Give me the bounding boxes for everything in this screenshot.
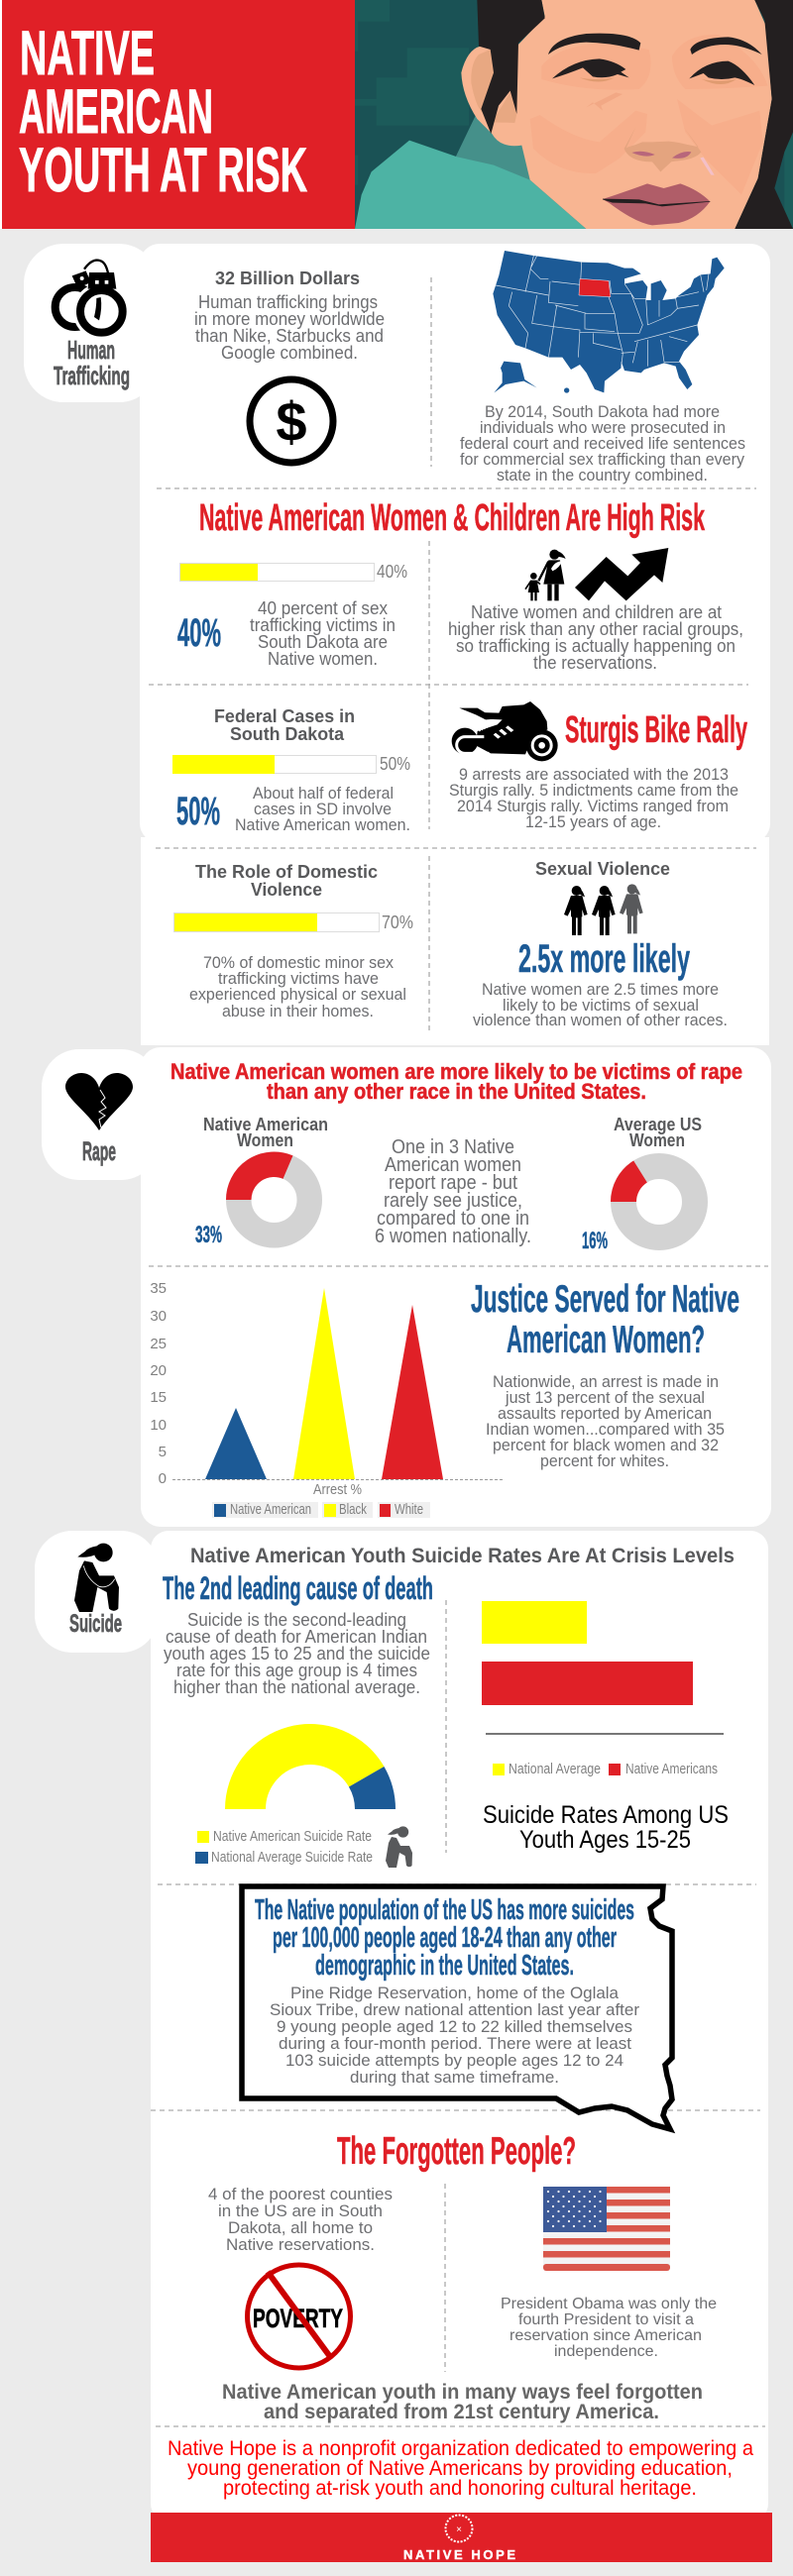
progress bar: 40 percent: 40% (377, 562, 407, 582)
heading: domestic violence (195, 862, 378, 900)
heading: federal cases (214, 706, 355, 744)
title (19, 19, 307, 205)
stat: 40 percent: 40% (177, 611, 221, 655)
chart caption (483, 1801, 729, 1854)
text block: higher risk: so trafficking is actually happening on (456, 636, 736, 656)
text block: domestic abuse: abuse in their homes. (222, 1002, 374, 1020)
text block: forgotten statement (222, 2381, 703, 2423)
text block: second-leading cause (164, 1610, 430, 1697)
callout text: during a four-month period. There were at least (279, 2034, 631, 2053)
text block: one in 3: 6 women nationally. (375, 1226, 531, 1247)
progress bar: 70 percent: 70% (382, 912, 413, 932)
heading: crisis levels: Native American Youth Suicide Rates Are At Crisis Levels (190, 1545, 735, 1567)
text block: South Dakota prosecutions: state in the country combined. (497, 466, 708, 484)
section label: human trafficking (54, 335, 130, 390)
icon: motorcycle (452, 701, 558, 761)
text block: domestic abuse: trafficking victims have (218, 969, 379, 988)
text block: forgotten statement: and separated from 21st century America. (264, 2401, 659, 2423)
footer: Native Hope: NATIVE HOPE (403, 2547, 515, 2562)
text block: arrests: percent for whites. (540, 1451, 669, 1470)
icon: small grieving girl (386, 1826, 412, 1868)
chart caption: Suicide Rates Among US (483, 1801, 729, 1829)
stat: 40 percent: 40 percent of sex (258, 598, 388, 618)
chart: arrest percent by race: Native American (230, 1501, 311, 1518)
section label: rape: Rape (82, 1136, 116, 1166)
chart: arrest percent by race: 20 (150, 1362, 167, 1379)
text block: Sturgis: 9 arrests are associated with the 2013 (459, 765, 729, 784)
heading: sexual violence: Sexual Violence (535, 859, 670, 879)
callout heading (255, 1894, 634, 1982)
callout text: Sioux Tribe, drew national attention last year after (270, 2000, 639, 2019)
panel: rape (42, 1047, 771, 1527)
footer: Native Hope (151, 2513, 772, 2562)
text block: poorest counties: in the US are in South (218, 2201, 383, 2220)
text block: forgotten statement: Native American youth in many ways feel forgotten (222, 2381, 703, 2404)
text block: one in 3 (375, 1136, 531, 1247)
icon: grieving girl (74, 1544, 119, 1612)
bar chart: suicide rates: Native Americans (625, 1761, 718, 1777)
chart: half donut suicide rate: National Average Suicide Rate (211, 1849, 373, 1866)
donut chart: average US women 16 percent (582, 1115, 702, 1254)
bar chart: suicide rates (482, 1601, 724, 1777)
text block: arrests: Nationwide, an arrest is made in (493, 1372, 719, 1391)
progress bar: 70 percent (174, 912, 413, 932)
section label: human trafficking: Trafficking (54, 361, 130, 390)
icon: dollar coin: $ (276, 390, 307, 453)
heading: rape statement (170, 1059, 742, 1104)
section label: human trafficking: Human (67, 335, 115, 365)
text block: President Obama: fourth President to visit a (518, 2311, 694, 2328)
chart: arrest percent by race: 5 (159, 1444, 167, 1460)
text block: arrests: assaults reported by American (498, 1404, 712, 1423)
chart: arrest percent by race: 30 (150, 1308, 167, 1325)
text block: second-leading cause: higher than the national average. (173, 1677, 420, 1697)
icon: three women (564, 884, 643, 935)
text block: South Dakota prosecutions: By 2014, South Dakota had more (485, 402, 720, 421)
heading: justice served (471, 1278, 739, 1361)
section label: suicide: Suicide (69, 1610, 122, 1638)
stat: 40 percent (177, 598, 396, 669)
bar chart: suicide rates: National Average (509, 1761, 601, 1777)
icon: dollar coin (250, 379, 333, 463)
callout text: 103 suicide attempts by people ages 12 to 24 (285, 2051, 623, 2070)
text block: Sturgis: 12-15 years of age. (525, 812, 661, 831)
donut chart: average US women 16 percent: Average US (614, 1115, 702, 1134)
heading: domestic violence: Violence (251, 880, 322, 900)
text block: poorest counties: Dakota, all home to (228, 2218, 373, 2237)
chart: arrest percent by race: 35 (150, 1280, 167, 1297)
panel: human trafficking (24, 244, 770, 1045)
text block: poorest counties: 4 of the poorest counties (208, 2185, 393, 2203)
text block: arrests: Indian women...compared with 35 (486, 1420, 725, 1439)
stat: 50 percent: About half of federal (253, 784, 394, 803)
text block: higher risk (448, 602, 743, 673)
text block: one in 3: American women (385, 1154, 521, 1176)
heading: rape statement: than any other race in the United States. (267, 1079, 646, 1104)
text block: Native Hope mission: young generation of Native Americans by providing education, (187, 2457, 733, 2480)
icon: broken heart (65, 1073, 133, 1130)
heading: rape statement: Native American women are more likely to be victims of rape (170, 1059, 742, 1084)
text block: President Obama: independence. (554, 2343, 658, 2360)
title: YOUTH AT RISK (19, 136, 307, 205)
text block: higher risk: higher risk than any other racial groups, (448, 619, 743, 639)
chart: arrest percent by race: White (395, 1501, 423, 1518)
text block: second-leading cause: youth ages 15 to 25 and the suicide (164, 1644, 430, 1664)
text block: domestic abuse (189, 953, 406, 1020)
text block: President Obama: President Obama was only the (501, 2296, 717, 2312)
chart: arrest percent by race (150, 1280, 504, 1518)
text block: Native Hope mission (168, 2437, 753, 2500)
text block: second-leading cause: Suicide is the second-leading (187, 1610, 406, 1630)
text block: South Dakota prosecutions: federal court and received life sentences (460, 434, 745, 453)
text block: South Dakota prosecutions: for commercial sex trafficking than every (460, 450, 744, 469)
callout heading: demographic in the United States. (315, 1950, 574, 1982)
progress bar: 40 percent (180, 562, 407, 582)
text block: Native Hope mission: Native Hope is a nonprofit organization dedicated to empowering a (168, 2437, 753, 2460)
chart: arrest percent by race: 25 (150, 1336, 167, 1352)
heading: federal cases: South Dakota (230, 724, 345, 744)
donut chart: Native American women 33 percent: Women (237, 1130, 293, 1150)
icon: no poverty sign: POVERTY (253, 2304, 343, 2333)
chart caption: Youth Ages 15-25 (519, 1826, 691, 1854)
heading: domestic violence: The Role of Domestic (195, 862, 378, 882)
text block: South Dakota prosecutions: individuals who were prosecuted in (480, 418, 726, 437)
illustration: woman's face (355, 0, 793, 229)
text block: higher risk: Native women and children are at (471, 602, 722, 622)
stat: 40 percent: Native women. (268, 649, 378, 669)
header banner (2, 0, 793, 229)
text block: President Obama: reservation since American (510, 2327, 702, 2344)
text block: sexual violence (473, 980, 728, 1029)
stat: 50 percent: cases in SD involve (254, 800, 392, 818)
stat: 40 percent: South Dakota are (258, 632, 388, 652)
heading: federal cases: Federal Cases in (214, 706, 355, 726)
donut chart: Native American women 33 percent (195, 1115, 328, 1248)
progress bar: 50 percent: 50% (380, 754, 410, 774)
text block: 32 billion dollars (194, 268, 385, 363)
icon: Native Hope logo (446, 2515, 472, 2542)
text block: one in 3: report rape - but (389, 1172, 517, 1194)
text block: Sturgis: 2014 Sturgis rally. Victims ranged from (457, 797, 729, 815)
text block: sexual violence: likely to be victims of sexual (503, 996, 699, 1015)
chart: half donut suicide rate (195, 1745, 375, 1866)
stat: 50 percent: Native American women. (235, 815, 410, 834)
chart: arrest percent by race: 10 (150, 1417, 167, 1434)
icon: no poverty sign (248, 2265, 351, 2368)
donut chart: Native American women 33 percent: 33% (195, 1222, 222, 1248)
stat: 40 percent: trafficking victims in (250, 615, 396, 635)
text block: one in 3: compared to one in (377, 1208, 529, 1230)
icon: Native Hope logo: × (456, 2524, 462, 2535)
text block: poorest counties: Native reservations. (226, 2235, 375, 2254)
icon: mother and child with rising arrow (525, 548, 668, 600)
text block: higher risk: the reservations. (533, 653, 657, 673)
map: United States with South Dakota highlighted (493, 251, 725, 393)
text block: 32 billion dollars: 32 Billion Dollars (215, 268, 360, 288)
text block: 32 billion dollars: in more money worldwide (194, 309, 385, 329)
donut chart: average US women 16 percent: Women (629, 1130, 685, 1150)
callout text: 9 young people aged 12 to 22 killed themselves (277, 2017, 632, 2036)
title: NATIVE (20, 19, 155, 88)
text block: Sturgis (449, 765, 738, 831)
text block: President Obama (501, 2296, 717, 2360)
chart: arrest percent by race: 15 (150, 1389, 167, 1406)
title: AMERICAN (19, 77, 213, 147)
heading: forgotten people: The Forgotten People? (337, 2130, 576, 2173)
callout text: Pine Ridge Reservation, home of the Oglala (290, 1984, 620, 2002)
text block: 32 billion dollars: Google combined. (221, 343, 358, 363)
text block: sexual violence: Native women are 2.5 times more (482, 980, 719, 999)
callout text (270, 1984, 639, 2087)
chart: arrest percent by race: 0 (159, 1470, 167, 1487)
heading: 2nd leading cause: The 2nd leading cause of death (163, 1570, 433, 1606)
progress bar: 50 percent (172, 754, 410, 774)
chart: arrest percent by race: Black (339, 1501, 367, 1518)
text block: arrests: just 13 percent of the sexual (505, 1388, 705, 1407)
text block: second-leading cause: cause of death for American Indian (166, 1627, 427, 1647)
text block: one in 3: One in 3 Native (392, 1136, 514, 1158)
text block: Native Hope mission: protecting at-risk youth and honoring cultural heritage. (223, 2477, 697, 2500)
icon: handcuffs (56, 261, 130, 340)
chart: arrest percent by race: Arrest % (313, 1481, 362, 1498)
text block: one in 3: rarely see justice, (384, 1190, 522, 1212)
callout text: during that same timeframe. (350, 2068, 559, 2087)
donut chart: average US women 16 percent: 16% (582, 1228, 608, 1254)
icon: American flag (543, 2187, 670, 2271)
text block: second-leading cause: rate for this age group is 4 times (176, 1661, 417, 1680)
text block: arrests: percent for black women and 32 (493, 1436, 719, 1454)
text block: South Dakota prosecutions (460, 402, 745, 484)
text block: 32 billion dollars: than Nike, Starbucks and (195, 326, 384, 346)
callout: South Dakota outline (242, 1886, 672, 2129)
stat: 50 percent: 50% (176, 790, 220, 833)
panel: suicide (35, 1531, 768, 2522)
text block: 32 billion dollars: Human trafficking brings (198, 292, 378, 312)
text block: arrests (486, 1372, 725, 1470)
text block: sexual violence: violence than women of other races. (473, 1011, 728, 1029)
donut chart: Native American women 33 percent: Native American (203, 1115, 328, 1134)
text block: domestic abuse: 70% of domestic minor sex (203, 953, 394, 972)
stat: 50 percent (176, 784, 410, 834)
text block: poorest counties (208, 2185, 393, 2254)
text block: domestic abuse: experienced physical or sexual (189, 985, 406, 1004)
chart: half donut suicide rate: Native American Suicide Rate (213, 1828, 372, 1845)
text block: Sturgis: Sturgis rally. 5 indictments came from the (449, 781, 738, 800)
